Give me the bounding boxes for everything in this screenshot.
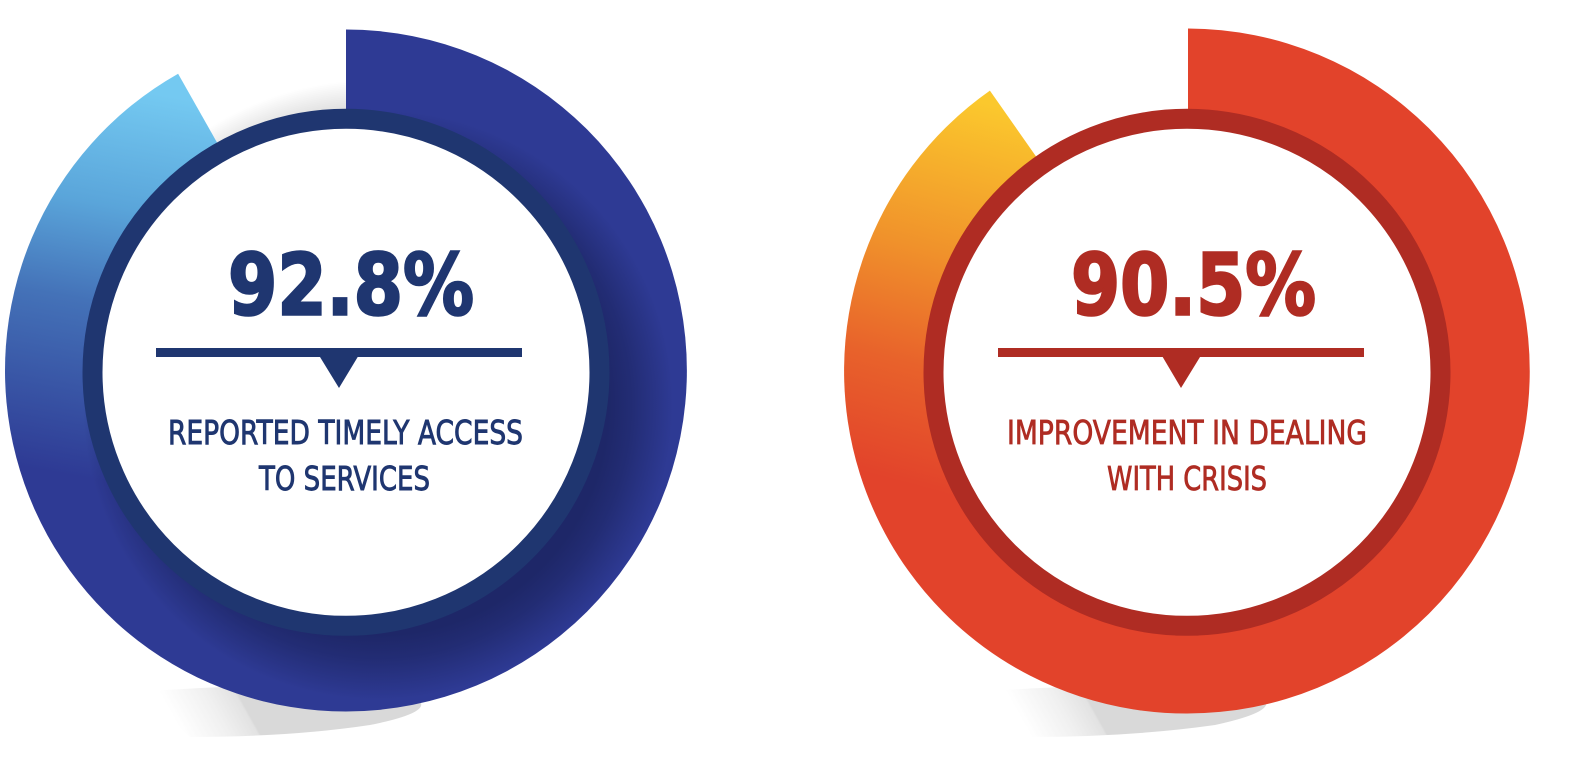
arc: gradient left segment bbox=[844, 91, 1186, 714]
gap shadow: blue donut bbox=[178, 30, 346, 370]
panel: timely access donut bbox=[5, 30, 687, 737]
value: 92.8%: 92.8% bbox=[228, 236, 474, 336]
ring and white centre bbox=[934, 119, 1440, 626]
divider with pointer bbox=[998, 348, 1364, 388]
label: reported timely access to services: TO SERVICES bbox=[258, 459, 430, 498]
arc inner shadow bbox=[83, 110, 673, 700]
divider with pointer bbox=[156, 348, 522, 388]
label: improvement in dealing with crisis: IMPROVEMENT IN DEALING bbox=[1007, 413, 1367, 452]
ring and white centre bbox=[92, 119, 600, 626]
floor shadow: red donut bbox=[980, 686, 1266, 737]
arc: gradient left segment bbox=[5, 74, 346, 711]
value: 90.5%: 90.5% bbox=[1071, 236, 1316, 336]
label: reported timely access to services: REPORTED TIMELY ACCESS bbox=[168, 413, 523, 452]
label: improvement in dealing with crisis: WITH CRISIS bbox=[1107, 459, 1267, 498]
arc: solid right segment bbox=[1186, 28, 1530, 714]
panel: dealing with crisis donut bbox=[844, 28, 1530, 737]
floor shadow: blue donut bbox=[140, 686, 421, 737]
label: improvement in dealing with crisis bbox=[1007, 413, 1367, 498]
arc: solid right segment bbox=[346, 30, 687, 712]
label: reported timely access to services bbox=[168, 413, 523, 498]
